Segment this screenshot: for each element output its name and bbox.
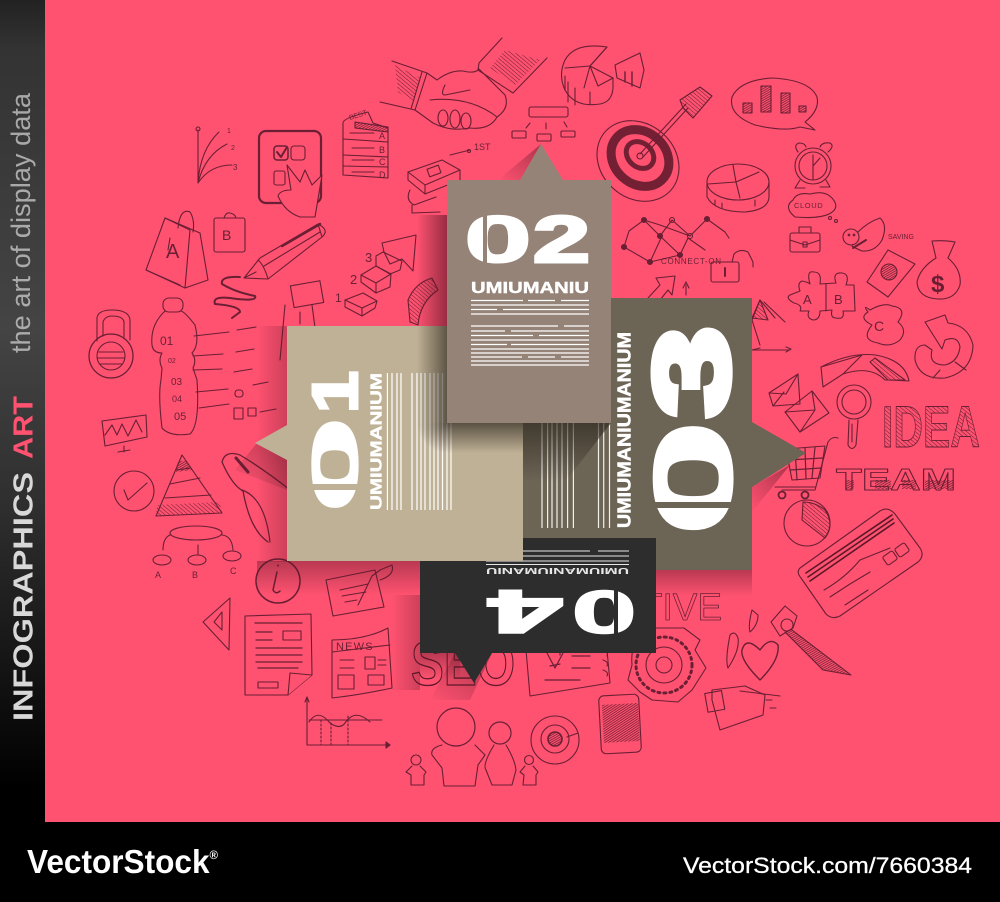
- panel 02 text lines: [471, 300, 589, 365]
- panel 01 heading: UMIUMANIUM: [369, 373, 386, 510]
- icon: envelopes: [769, 374, 829, 432]
- icon: family of people: [406, 708, 538, 786]
- icon: alarm clock: [795, 143, 832, 188]
- icon: connection network: CONNECT-ON: [661, 257, 722, 266]
- icon: heart: [727, 610, 778, 680]
- footer bar: [0, 822, 1000, 902]
- icon: money bag: [917, 241, 960, 299]
- footer image id: VectorStock.com/7660384: [683, 853, 972, 878]
- text doodle: TEAM: TEAM: [836, 462, 956, 497]
- icon: tree diagram D: C: [230, 566, 237, 576]
- icon: growth curves: 2: [231, 145, 235, 152]
- icon: function chart: [305, 697, 390, 748]
- text doodle: CREATIVE: TIVE: [640, 587, 722, 629]
- panel 02: [447, 144, 611, 423]
- icon: circular arrow: [915, 315, 973, 378]
- icon: tree diagram D: [153, 526, 241, 580]
- icon: banknote: [867, 250, 915, 297]
- icon: database stack: C: [379, 157, 386, 167]
- icon: newspaper: NEWS: [336, 641, 374, 653]
- icon: folder and notes: [705, 686, 780, 730]
- panel 01 number: 1: [299, 371, 371, 413]
- icon: shopping bag B: B: [222, 227, 231, 243]
- sidebar: [0, 0, 45, 822]
- icon: staircase arrow: 1: [335, 291, 342, 305]
- panel 01 number: [299, 371, 371, 512]
- icon: curved shape: [408, 278, 438, 325]
- icon: magnifying glass: [837, 385, 871, 448]
- icon: puzzle pieces: B: [834, 292, 843, 307]
- panel 02 number: 0: [464, 202, 532, 276]
- panel 03 number: [632, 327, 755, 536]
- icon: pie chart with slice: [562, 46, 644, 105]
- icon: info circle: [256, 559, 300, 603]
- icon: growth curves: 1: [227, 128, 231, 135]
- icon: USB stick: [280, 281, 324, 365]
- icon: gear: [628, 628, 706, 702]
- icon: shopping bag A: [146, 211, 208, 288]
- icon: database stack: B: [379, 145, 385, 155]
- icon: newspaper: [332, 628, 392, 698]
- panel 03 number: 0: [632, 420, 755, 536]
- icon: org chart: [512, 107, 575, 141]
- panel 01: [255, 326, 523, 561]
- icon: tree diagram D: A: [155, 570, 161, 580]
- panel 02 number: [464, 202, 590, 276]
- icon: curved arrow: [821, 354, 909, 387]
- icon: shopping bag A: A: [166, 241, 180, 263]
- icon: tree diagram D: B: [192, 570, 198, 580]
- icon: round pie: [707, 164, 769, 212]
- icon: padlock: [89, 310, 133, 378]
- icon: database stack: BEST: [348, 109, 369, 122]
- panel 03: [522, 298, 806, 570]
- panel 01 number: 0: [299, 417, 371, 512]
- icon: computer mouse: [222, 454, 290, 542]
- footer brand: ®: [210, 848, 218, 862]
- icon: puzzle piece C: [864, 305, 904, 345]
- panel 03 heading: UMIUMANIUMANIUM: [614, 332, 634, 528]
- panel 03 text lines: [542, 423, 610, 528]
- icon: puzzle pieces: [788, 272, 855, 320]
- panel 02 number: 2: [533, 202, 590, 276]
- icon: pencil and squiggle: [215, 224, 325, 318]
- doodle icons: [89, 38, 980, 786]
- icon: piggy bank: [843, 218, 914, 251]
- footer brand: VectorStock: [27, 843, 218, 880]
- icon: database stack: D: [379, 170, 386, 180]
- icon: credit card: [798, 509, 922, 618]
- panel 04 text lines: [486, 551, 629, 564]
- sidebar title: INFOGRAPHICS: [8, 472, 38, 721]
- icon: document: [245, 614, 312, 695]
- icon: growth curves: [196, 127, 238, 183]
- icon: water bottle: 02: [168, 358, 176, 365]
- sidebar tagline: the art of display data: [6, 92, 36, 353]
- panel 04 number: [488, 578, 636, 645]
- icon: briefcase: [790, 227, 820, 252]
- panel 04 number: 4: [488, 578, 562, 645]
- icon: handshake: [380, 38, 547, 129]
- icon: smartphone: [599, 694, 641, 754]
- icon: line chart with flags: [752, 300, 791, 352]
- icon: staircase arrow: 2: [350, 272, 357, 287]
- icon: water bottle: 04: [172, 394, 182, 404]
- icon: up arrow: [648, 276, 689, 300]
- icon: piggy bank: SAVING: [888, 234, 914, 241]
- icon: coffee cup: [531, 716, 579, 764]
- panel 04 number: 0: [572, 578, 636, 645]
- icon: pie circle: [784, 500, 830, 546]
- icon: triangle ruler: [203, 598, 230, 650]
- shadow cast by panel 02: [417, 326, 611, 482]
- icon: pyramid: [156, 455, 222, 516]
- icon: staircase arrow: [335, 235, 416, 316]
- panel 01 text lines: [387, 373, 451, 510]
- icon: tablet with hand: [259, 131, 322, 217]
- text doodle: SEO: SEO: [411, 630, 515, 699]
- icon: database stack: [343, 109, 388, 180]
- icon: books and pin: 1ST: [474, 142, 491, 152]
- icon: puzzle piece C: C: [874, 318, 884, 334]
- panel shadows: [235, 144, 790, 700]
- icon: presentation board: [102, 415, 147, 452]
- icon: water bottle: 03: [171, 377, 183, 388]
- icon: water bottle: [152, 298, 276, 435]
- icon: notebook with pencil: [526, 640, 610, 696]
- icon: cloud: [788, 193, 838, 222]
- icon: water bottle: 01: [160, 334, 174, 348]
- panel 03 number: 3: [633, 327, 751, 417]
- icon: necktie: [771, 606, 851, 675]
- icon: speech bubble with bars: [731, 78, 818, 130]
- icon: cloud: CLOUD: [794, 201, 823, 210]
- panel 04 heading: UMIUMANIUMANIU: [486, 566, 629, 575]
- icon: check circle: [114, 471, 154, 511]
- icon: puzzle pieces: A: [803, 292, 812, 307]
- icon: water bottle: 05: [174, 411, 186, 423]
- icon: books and pin: [408, 142, 491, 213]
- icon: open padlock: [711, 250, 753, 282]
- panel 04: [420, 538, 656, 683]
- icon: pinned note: [326, 565, 392, 616]
- icon: target with arrow: [581, 87, 712, 218]
- icon: staircase arrow: 3: [365, 250, 372, 265]
- icon: shopping cart: [775, 438, 838, 498]
- icon: connection network: [622, 216, 729, 266]
- icon: database stack: A: [379, 131, 385, 141]
- panel 02 heading: UMIUMANIU: [471, 280, 589, 297]
- icon: money bag: $: [931, 271, 945, 298]
- icon: growth curves: 3: [233, 163, 238, 172]
- icon: shopping bag B: [214, 213, 245, 252]
- sidebar title accent: ART: [8, 396, 38, 459]
